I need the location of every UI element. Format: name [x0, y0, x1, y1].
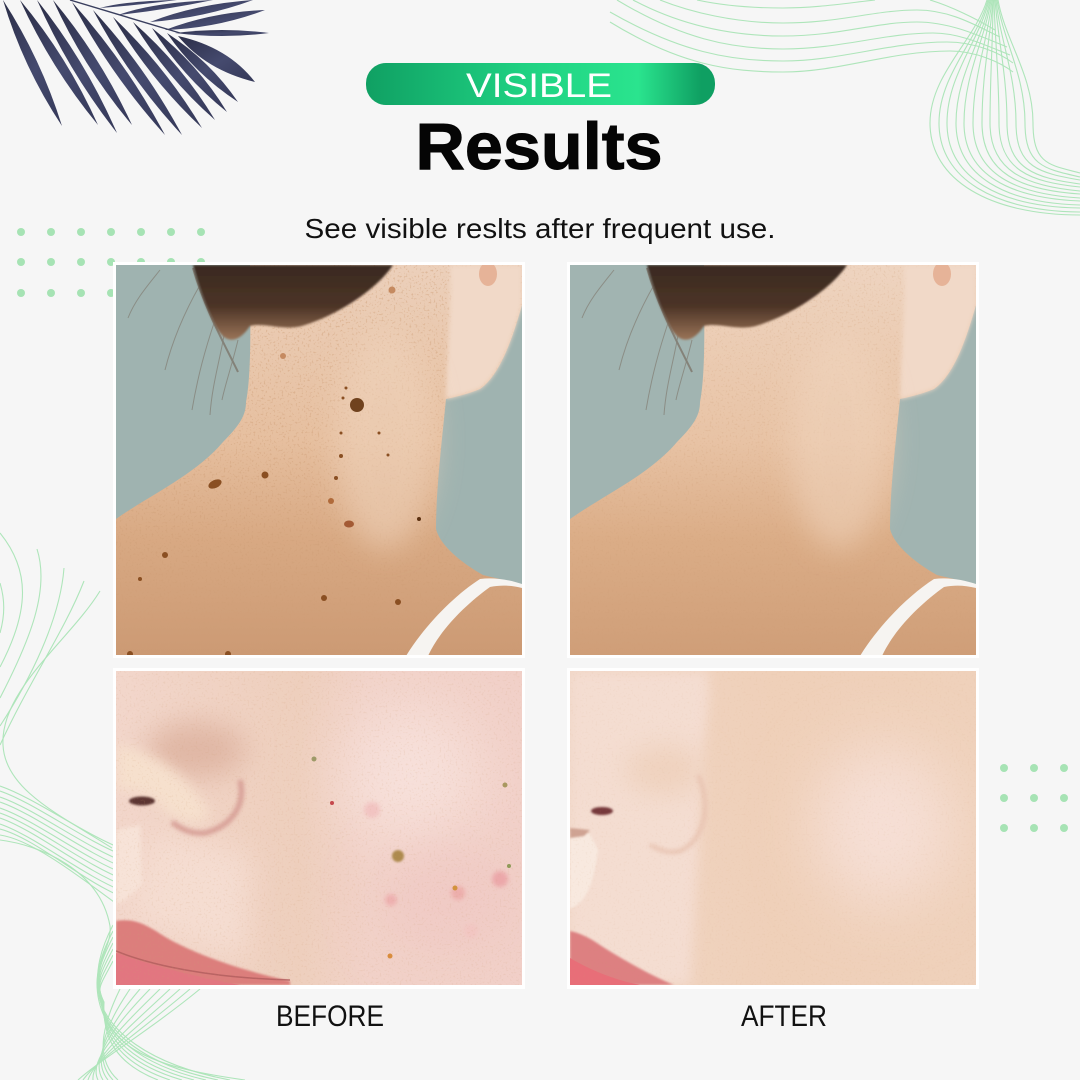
label: after: AFTER: [741, 1000, 827, 1033]
pale cheek centre: [340, 705, 480, 845]
moles and freckles: [127, 286, 421, 657]
nose bright bridge: [120, 750, 205, 820]
skin pore texture: [570, 671, 976, 985]
philtrum: [570, 832, 598, 908]
hair: [647, 265, 847, 340]
nose edge: [650, 775, 705, 852]
skin pore texture: [116, 671, 522, 985]
lower lip: [116, 953, 240, 985]
nostril: [591, 807, 613, 815]
stray hairs: [128, 268, 238, 415]
badge: VISIBLE pill: VISIBLE: [466, 67, 612, 105]
decorative dots: left grid: [17, 228, 205, 297]
nostril: [129, 796, 155, 806]
subtitle: See visible reslts after frequent use.: [304, 213, 776, 244]
badge: VISIBLE pill: [366, 63, 715, 105]
blemishes: [312, 756, 511, 958]
skin freckle texture: [120, 265, 522, 524]
panel: face before photo: [113, 668, 525, 989]
strap: [406, 578, 522, 656]
jaw highlight: [446, 265, 522, 399]
bright area under nose: [153, 846, 250, 950]
upper lip: [570, 931, 674, 985]
lower lip: [570, 958, 640, 985]
icon: palm leaf: [3, 0, 269, 135]
stray hairs: [582, 268, 692, 415]
mouth line: [116, 951, 290, 980]
cheek glow: [814, 745, 954, 905]
decorative wave lines: left side: [0, 533, 245, 1080]
lower cheek redness: [380, 850, 520, 950]
decorative wave lines: top right horizontal: [610, 0, 1013, 72]
strap: [860, 578, 976, 656]
jaw highlight: [900, 265, 976, 399]
neck soft highlight: [335, 330, 435, 550]
panel: neck after photo: [567, 262, 979, 658]
philtrum shadow: [570, 828, 590, 838]
neck soft highlight: [789, 330, 889, 550]
panel: face after photo: [567, 668, 979, 989]
philtrum: [117, 826, 140, 902]
title: Results: [416, 109, 662, 183]
decorative dots: right grid: [1000, 764, 1068, 832]
ear: [933, 265, 951, 286]
panel: neck before photo: [113, 262, 525, 658]
bright left region: [570, 671, 709, 985]
top of nose shade: [146, 722, 246, 778]
skin fine texture: [636, 265, 975, 480]
nose crease: [172, 780, 241, 833]
upper lip: [116, 920, 290, 985]
skin: neck and shoulders: [116, 265, 522, 655]
skin: neck and shoulders: [570, 265, 976, 655]
nose shade: [628, 744, 697, 796]
ear: [479, 265, 497, 286]
hair: [193, 265, 393, 340]
decorative wave lines: top right fan: [930, 0, 1080, 215]
label: before: BEFORE: [276, 1000, 384, 1033]
